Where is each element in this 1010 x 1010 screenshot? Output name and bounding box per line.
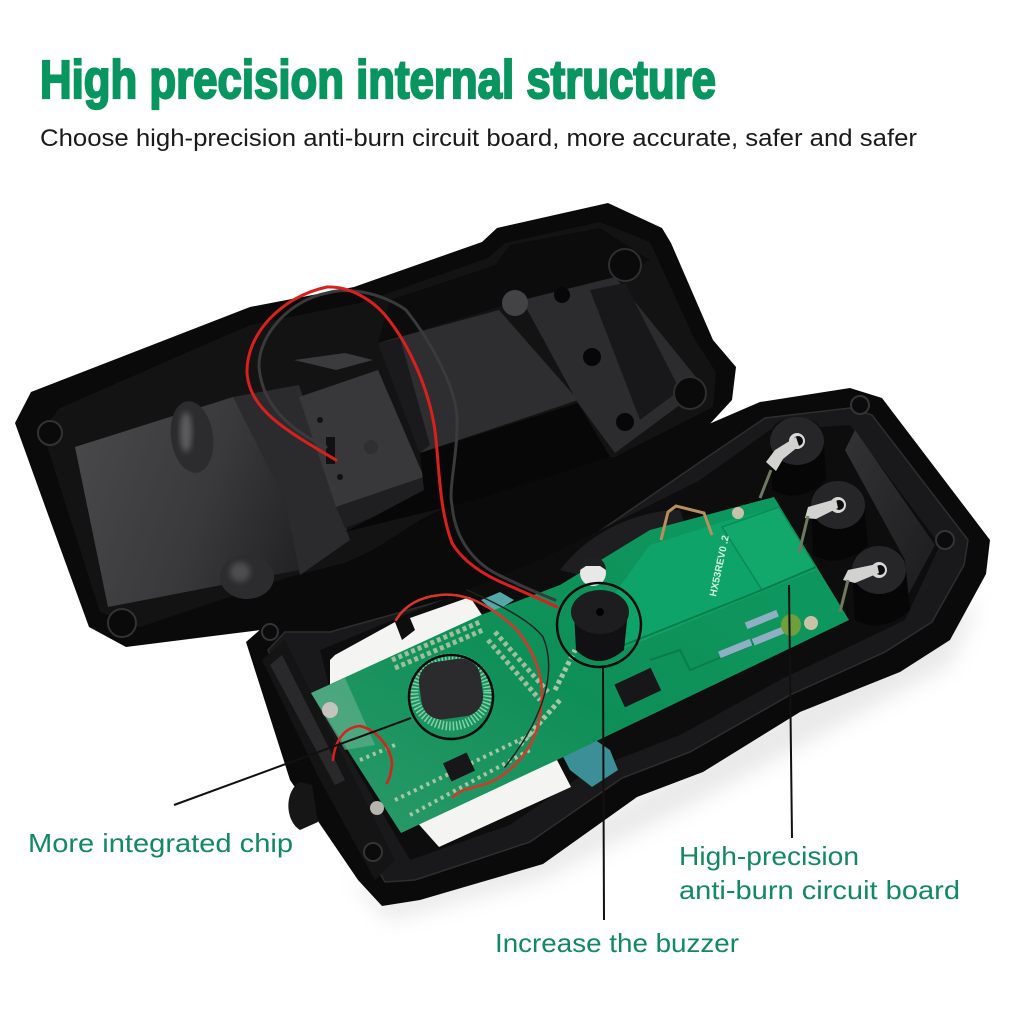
wires from shell <box>247 287 557 797</box>
label: circuit board: High-precision <box>679 841 859 871</box>
jack sockets <box>770 417 910 626</box>
callout line: circuit board <box>789 585 792 838</box>
board silk text: HX53REV0 .2 <box>708 534 732 598</box>
screw posts <box>609 249 641 281</box>
ceramic capacitor <box>781 614 801 636</box>
upper bright zone <box>610 507 816 650</box>
circuit board <box>311 437 879 833</box>
pad rows <box>392 622 548 700</box>
top wall dark <box>378 228 650 343</box>
bumps <box>166 398 218 476</box>
right floor <box>845 430 935 610</box>
buzzer highlight <box>557 583 641 667</box>
screw posts <box>851 396 869 414</box>
grey band above battery cover <box>378 310 578 453</box>
label: circuit board: anti-burn circuit board <box>679 875 960 905</box>
screws <box>322 702 338 718</box>
copper pad <box>722 507 816 590</box>
IC 8 pin <box>614 668 661 707</box>
chip highlight <box>409 655 493 739</box>
capacitor <box>580 557 606 586</box>
battery cover top <box>299 370 424 507</box>
side button <box>288 782 318 830</box>
label: buzzer: Increase the buzzer <box>495 928 739 958</box>
triangle detail <box>294 353 373 370</box>
trace lines <box>604 567 816 670</box>
battery strip lower <box>415 760 571 847</box>
right shell floor <box>522 277 704 453</box>
left light end <box>311 678 375 750</box>
resistors <box>745 610 779 629</box>
black cover face <box>345 403 610 532</box>
small IC <box>443 752 475 782</box>
callout line: chip <box>174 718 411 805</box>
wire connector <box>326 437 335 464</box>
inner floor <box>320 425 940 860</box>
title: High precision internal structure <box>40 50 716 110</box>
battery strip upper <box>330 597 482 690</box>
shell floor left <box>75 397 336 607</box>
device: upper back shell <box>15 203 736 647</box>
terminal strips <box>766 437 799 471</box>
shell floor strip <box>233 385 350 575</box>
foam under board <box>560 510 690 580</box>
teal parts <box>557 733 618 787</box>
subtitle: Choose high-precision anti-burn circuit board, more accurate, safer and safer <box>40 125 917 152</box>
label: chip: More integrated chip <box>28 828 293 858</box>
callout line: buzzer <box>603 667 604 920</box>
soft drop shadow <box>350 600 980 920</box>
left side wall <box>262 640 395 880</box>
device: lower front shell <box>246 388 990 906</box>
copper loop <box>661 506 712 540</box>
